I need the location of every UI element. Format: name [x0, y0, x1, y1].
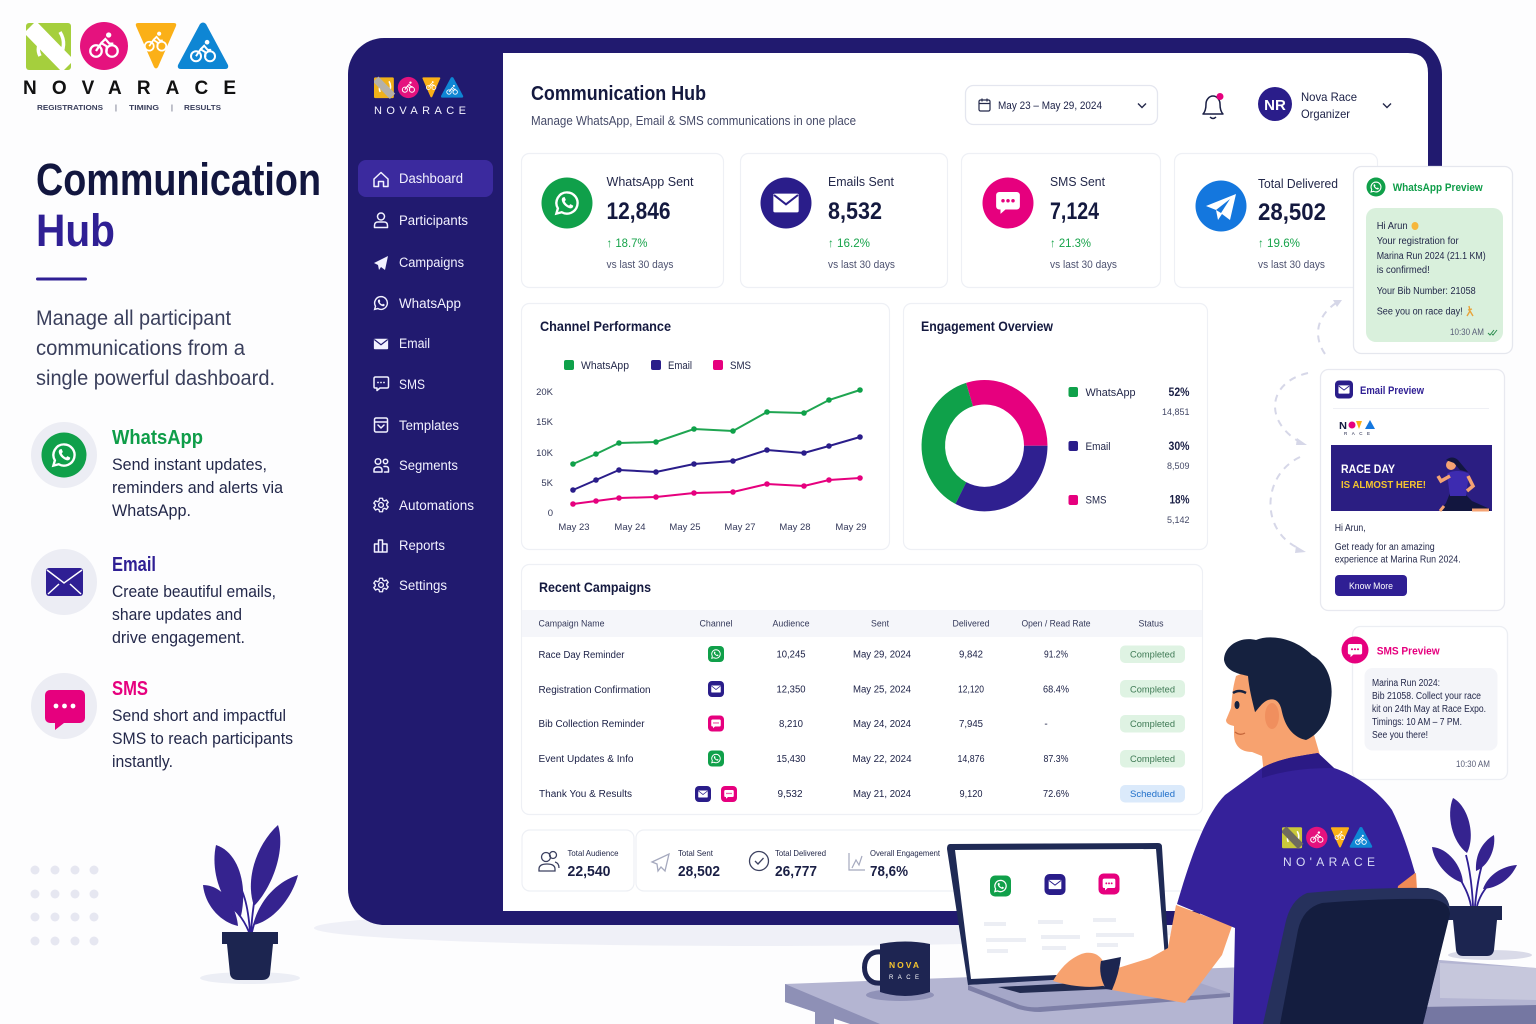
row: Bib Collection Reminder: [538, 715, 1185, 732]
row: Event Updates & Info: 87.3%: [1044, 754, 1069, 765]
menu: Reports: Reports: [399, 538, 445, 553]
KPI: WhatsApp Sent: [522, 154, 724, 288]
plant: right: [1432, 798, 1532, 960]
left arm and hand: [1112, 905, 1232, 1003]
panel: channel performance: Channel Performance: [540, 318, 671, 334]
KPI: SMS Sent: vs last 30 days: [1050, 259, 1117, 271]
icon: notification bell: [1203, 93, 1224, 118]
arrow: to WhatsApp preview: [1318, 300, 1342, 354]
legend: SMS: [1068, 494, 1190, 525]
row: Registration Confirmation: Completed: [1130, 684, 1175, 696]
KPI: WhatsApp Sent: ↑ 18.7%: [606, 236, 648, 250]
table header: Sent: [871, 618, 889, 628]
legend: SMS: 18%: [1170, 494, 1190, 506]
row: Event Updates & Info: Completed: [1130, 754, 1175, 765]
intro text: Manage all participant: [36, 307, 231, 330]
KPI: Total Delivered: [1174, 154, 1378, 288]
eye and brow: [1233, 691, 1246, 734]
feature: Email: [31, 549, 276, 647]
row: Race Day Reminder: 10,245: [776, 650, 806, 660]
row: Event Updates & Info: 15,430: [776, 754, 806, 765]
chart legend: WhatsApp: [581, 360, 629, 372]
row: Registration Confirmation: Registration Confirmation: [538, 685, 650, 696]
card: SMS preview: 10:30 AM: [1456, 759, 1490, 769]
screen icon: SMS: [1098, 874, 1120, 894]
email banner: RACE DAY: [1341, 464, 1395, 476]
far arm: [1396, 873, 1417, 890]
summary: total delivered: [750, 848, 826, 880]
shirt logo: NO'ARACE: [1283, 855, 1375, 869]
menu: WhatsApp: WhatsApp: [399, 296, 461, 311]
KPI: Total Delivered: ↑ 19.6%: [1258, 236, 1300, 250]
y axis labels: [536, 387, 554, 519]
feature: SMS: Send short and impactful: [112, 706, 286, 725]
brand logo: RESULTS: [184, 103, 221, 112]
menu: Dashboard: [374, 171, 463, 186]
legend: WhatsApp: WhatsApp: [1086, 387, 1136, 399]
laptop: [947, 843, 1230, 1012]
row: Event Updates & Info: 14,876: [958, 754, 985, 765]
card: WhatsApp preview: is confirmed!: [1377, 265, 1430, 276]
KPI: WhatsApp Sent: WhatsApp Sent: [606, 174, 694, 189]
menu: SMS: SMS: [399, 377, 425, 392]
feature: SMS: SMS: [112, 678, 148, 700]
button: Know More: Know More: [1349, 581, 1393, 592]
summary: overall engagement: 78,6%: [870, 863, 908, 880]
feature: WhatsApp: reminders and alerts via: [112, 478, 284, 497]
summary: overall engagement: Overall Engagement: [870, 848, 941, 858]
summary: total audience: 22,540: [568, 863, 610, 880]
card: WhatsApp preview: Your registration for: [1377, 236, 1459, 247]
row: Bib Collection Reminder: Bib Collection Reminder: [538, 719, 645, 730]
KPI: Emails Sent: [740, 154, 948, 288]
KPI: SMS Sent: ↑ 21.3%: [1050, 236, 1091, 250]
menu: Automations: Automations: [399, 498, 474, 513]
feature: Email: share updates and: [112, 605, 242, 624]
x axis labels: May 28: [779, 522, 811, 533]
row: Thank You & Results: [539, 785, 1185, 802]
legend: Email: Email: [1086, 441, 1110, 453]
card: WhatsApp preview: Marina Run 2024 (21.1 KM): [1377, 251, 1486, 262]
office chair: [1263, 888, 1450, 1024]
KPI: Emails Sent: 8,532: [828, 198, 882, 225]
line: WhatsApp: [570, 387, 863, 467]
table header: Audience: [772, 618, 810, 628]
email banner: [1331, 445, 1492, 511]
row: Race Day Reminder: [538, 646, 1185, 663]
x axis labels: May 23: [558, 522, 590, 533]
row: Race Day Reminder: May 29, 2024: [853, 650, 911, 660]
page title: Communication: [36, 154, 321, 205]
mini logo: [1339, 420, 1375, 436]
screen icon: Email: [1044, 874, 1066, 895]
decorative dot grid: [30, 866, 98, 946]
row: Race Day Reminder: 91.2%: [1044, 650, 1068, 660]
mini logo: RACE: [1344, 431, 1370, 436]
card: SMS preview: Marina Run 2024:: [1372, 678, 1440, 689]
ear: [1265, 703, 1279, 729]
card: WhatsApp preview: Your Bib Number: 21058: [1377, 286, 1476, 297]
feature: SMS: [31, 673, 293, 771]
legend: WhatsApp: [1068, 387, 1190, 417]
KPI: SMS Sent: 7,124: [1050, 198, 1100, 225]
row: Registration Confirmation: May 25, 2024: [853, 684, 911, 696]
menu active item: [358, 160, 493, 197]
dashboard frame: [348, 38, 1460, 928]
summary: total audience: [522, 830, 634, 891]
table header: Delivered: [952, 618, 990, 628]
table header: Campaign Name: [538, 618, 604, 628]
KPI: SMS Sent: SMS Sent: [1050, 174, 1105, 189]
sidebar logo: [373, 76, 466, 117]
legend: Email: 8,509: [1167, 461, 1190, 471]
donut chart: [933, 392, 1036, 499]
row: Registration Confirmation: [538, 680, 1185, 698]
sidebar logo: NOVARACE: [374, 105, 466, 117]
button: Know More: [1335, 575, 1407, 596]
frame shadow: [314, 910, 1206, 946]
y axis labels: 0: [548, 508, 553, 519]
summary: overall engagement: [849, 848, 941, 880]
row: Bib Collection Reminder: 8,210: [779, 719, 803, 730]
row: Event Updates & Info: Event Updates & Info: [538, 754, 634, 765]
line: SMS: [570, 475, 863, 507]
row: Thank You & Results: 9,532: [778, 789, 803, 800]
chart legend: SMS: [730, 360, 751, 372]
neck and face: [1226, 670, 1322, 775]
card: WhatsApp preview: WhatsApp Preview: [1393, 182, 1483, 194]
menu: Settings: Settings: [399, 578, 447, 593]
user profile: NR: [1264, 97, 1286, 114]
feature: Email: Email: [112, 554, 156, 576]
brand logo: NOVARACE: [23, 78, 236, 99]
feature: SMS: SMS to reach participants: [112, 729, 293, 748]
icon: runner: [1467, 306, 1473, 316]
x axis labels: [558, 522, 867, 533]
summary: total sent: Total Sent: [678, 848, 714, 858]
menu: Email: Email: [399, 336, 430, 351]
menu: Dashboard: Dashboard: [399, 171, 463, 186]
menu: Settings: [374, 578, 447, 593]
plant: left: [200, 825, 300, 984]
dashboard header: Communication Hub: [531, 83, 706, 105]
KPI: Total Delivered: vs last 30 days: [1258, 259, 1325, 271]
legend: SMS: 5,142: [1167, 515, 1190, 525]
panel: engagement overview: [904, 304, 1208, 550]
row: Race Day Reminder: Completed: [1130, 650, 1175, 660]
KPI: Total Delivered: 28,502: [1258, 199, 1326, 226]
card: SMS preview: [1342, 626, 1508, 780]
legend: WhatsApp: 14,851: [1162, 407, 1190, 417]
mini logo: N: [1339, 420, 1347, 432]
email banner: IS ALMOST HERE!: [1341, 479, 1426, 491]
row: Thank You & Results: 9,120: [960, 789, 983, 800]
card: Email preview: Email Preview: [1360, 385, 1424, 397]
menu: Segments: Segments: [399, 458, 458, 473]
summary bar: [636, 830, 1206, 891]
illustration: runner: [1438, 458, 1490, 511]
card: WhatsApp preview: Hi Arun: [1377, 221, 1408, 232]
menu: Templates: Templates: [399, 418, 459, 433]
y axis labels: 10K: [536, 448, 554, 459]
hair: [1224, 637, 1332, 740]
card: SMS preview: See you there!: [1372, 730, 1428, 741]
row: Bib Collection Reminder: Completed: [1130, 719, 1175, 730]
brand logo: [23, 21, 236, 112]
feature: WhatsApp: [31, 422, 284, 520]
menu: Email: [374, 336, 430, 351]
arrow: to Email preview bottom: [1270, 457, 1306, 553]
x axis labels: May 29: [835, 522, 867, 533]
summary: total sent: [652, 848, 720, 880]
feature: WhatsApp: WhatsApp: [112, 427, 203, 449]
KPI: WhatsApp Sent: vs last 30 days: [606, 259, 674, 271]
legend: Email: [1068, 441, 1190, 471]
KPI: Total Delivered: Total Delivered: [1258, 176, 1338, 191]
feature: WhatsApp: WhatsApp.: [112, 501, 191, 520]
card: WhatsApp preview: 10:30 AM: [1450, 327, 1484, 338]
icon: waving hand: [1412, 222, 1418, 230]
brand logo: |: [115, 103, 117, 112]
y axis labels: 5K: [541, 478, 554, 489]
panel: recent campaigns: Recent Campaigns: [539, 579, 651, 595]
table header: [522, 610, 1202, 637]
dashboard header: [531, 83, 856, 128]
legend: Email: 30%: [1168, 441, 1190, 453]
menu: SMS: [374, 377, 425, 392]
row: Registration Confirmation: 12,350: [776, 684, 806, 696]
y axis labels: 20K: [536, 387, 554, 398]
sidebar: [358, 76, 493, 593]
row: Race Day Reminder: 9,842: [959, 650, 983, 660]
desk: [785, 960, 1536, 1024]
row: Bib Collection Reminder: May 24, 2024: [853, 719, 911, 730]
card: Email preview: Hi Arun,: [1335, 523, 1366, 534]
summary: total delivered: 26,777: [775, 863, 817, 880]
page title: [36, 154, 321, 256]
table header: Channel: [700, 618, 732, 628]
brand logo: |: [171, 103, 173, 112]
row: Thank You & Results: May 21, 2024: [853, 789, 911, 800]
x axis labels: May 25: [669, 522, 701, 533]
y axis labels: 15K: [536, 417, 554, 428]
panel: channel performance: [522, 304, 890, 550]
shirt logo: [1281, 826, 1375, 869]
menu: Participants: Participants: [399, 213, 468, 228]
row: Bib Collection Reminder: -: [1044, 719, 1048, 730]
page title: Hub: [36, 205, 115, 256]
card: WhatsApp preview: See you on race day!: [1377, 306, 1463, 318]
row: Registration Confirmation: 12,120: [958, 684, 984, 696]
feature: WhatsApp: Send instant updates,: [112, 455, 267, 474]
menu: Campaigns: Campaigns: [399, 255, 464, 270]
menu: Campaigns: [374, 255, 464, 270]
card: SMS preview: SMS Preview: [1377, 646, 1440, 658]
chart legend: [564, 360, 751, 372]
row: Bib Collection Reminder: 7,945: [959, 719, 983, 730]
coffee mug: NOVA: [889, 960, 919, 970]
feature: Email: Create beautiful emails,: [112, 582, 276, 601]
KPI: SMS Sent: [962, 154, 1160, 288]
person at laptop: [1053, 637, 1417, 1024]
x axis labels: May 27: [724, 522, 756, 533]
dashboard header: Manage WhatsApp, Email & SMS communications in one place: [531, 114, 856, 128]
intro text: single powerful dashboard.: [36, 367, 275, 390]
row: Event Updates & Info: [538, 750, 1185, 768]
intro text: communications from a: [36, 337, 245, 360]
summary: total sent: 28,502: [678, 863, 720, 880]
table header: Open / Read Rate: [1022, 618, 1090, 628]
card: SMS preview: Bib 21058. Collect your race: [1372, 691, 1481, 702]
chart legend: Email: [668, 360, 692, 372]
panel: recent campaigns: [522, 564, 1202, 814]
panel: engagement overview: Engagement Overview: [921, 318, 1053, 334]
brand logo: REGISTRATIONS: [37, 103, 103, 112]
table header: Status: [1138, 618, 1164, 628]
row: Race Day Reminder: Race Day Reminder: [538, 650, 625, 661]
KPI: Emails Sent: ↑ 16.2%: [828, 236, 870, 250]
feature: Email: drive engagement.: [112, 628, 245, 647]
line: Email: [570, 434, 863, 493]
row: Thank You & Results: Scheduled: [1130, 789, 1175, 800]
feature: SMS: instantly.: [112, 752, 173, 771]
card: WhatsApp preview: [1354, 166, 1512, 354]
row: Registration Confirmation: 68.4%: [1043, 684, 1069, 696]
row: Thank You & Results: 72.6%: [1043, 789, 1069, 800]
brand logo: TIMING: [129, 103, 159, 112]
date picker: [966, 86, 1158, 124]
card: SMS preview: kit on 24th May at Race Expo.: [1372, 704, 1486, 715]
KPI: WhatsApp Sent: 12,846: [606, 198, 670, 225]
card: Email preview: experience at Marina Run 2024.: [1335, 554, 1461, 566]
x axis labels: May 24: [614, 522, 646, 533]
KPI: Emails Sent: Emails Sent: [828, 174, 894, 189]
user profile: Organizer: [1301, 107, 1350, 121]
title underline: [36, 278, 87, 280]
legend: WhatsApp: 52%: [1168, 387, 1190, 399]
coffee mug: RACE: [889, 975, 919, 981]
arrow: to Email preview top: [1275, 373, 1308, 445]
legend: SMS: SMS: [1086, 494, 1106, 506]
user profile: Nova Race: [1301, 90, 1357, 104]
intro text: [36, 307, 275, 390]
card: Email preview: Get ready for an amazing: [1335, 542, 1435, 553]
date picker: May 23 – May 29, 2024: [998, 100, 1102, 112]
card: Email preview: [1320, 370, 1504, 610]
user profile: [1258, 87, 1391, 121]
KPI: Emails Sent: vs last 30 days: [828, 259, 895, 271]
screen icon: WhatsApp: [990, 876, 1011, 896]
summary: total delivered: Total Delivered: [775, 848, 826, 858]
card: SMS preview: Timings: 10 AM – 7 PM.: [1372, 717, 1462, 728]
summary: total audience: Total Audience: [568, 848, 619, 858]
shirt: [1177, 753, 1415, 1024]
row: Event Updates & Info: May 22, 2024: [852, 754, 912, 765]
menu: Segments: [374, 458, 458, 473]
row: Thank You & Results: Thank You & Results: [539, 789, 632, 800]
wristwatch: [1100, 957, 1121, 990]
menu: Reports: [374, 538, 445, 553]
coffee mug: [864, 942, 934, 1001]
